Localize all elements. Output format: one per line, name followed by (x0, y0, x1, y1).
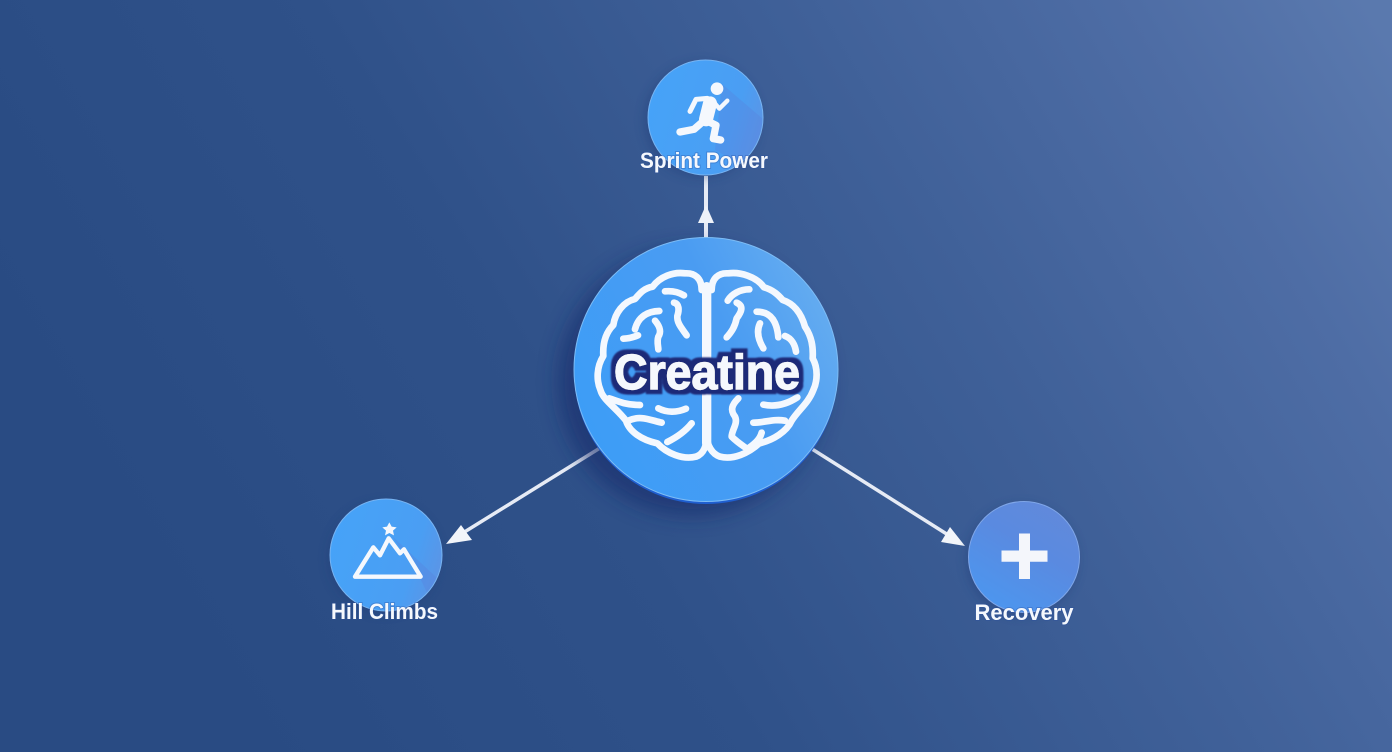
infographic: creatine benefits hub diagram (330, 0, 1392, 752)
node: sprint power (640, 60, 770, 180)
hub title: Creatine: Creatine (614, 346, 800, 400)
arrow: creatine to recovery (812, 449, 965, 546)
label: Recovery: Recovery (974, 600, 1074, 625)
label: Sprint Power: Sprint Power (640, 148, 768, 173)
node: recovery (966, 502, 1080, 625)
arrow: creatine to hill climbs (446, 448, 600, 544)
icon: plus (1002, 534, 1048, 579)
long shadow behind runner (715, 84, 762, 160)
node: hill climbs (328, 499, 450, 624)
icon: mountain with star (355, 522, 421, 577)
icon: brain outline (598, 273, 817, 458)
long shadow behind mountain (394, 538, 432, 592)
central hub: creatine (558, 238, 838, 516)
arrow: creatine to sprint power (698, 176, 714, 242)
icon: runner (680, 82, 727, 140)
label: Hill Climbs: Hill Climbs (331, 599, 438, 624)
